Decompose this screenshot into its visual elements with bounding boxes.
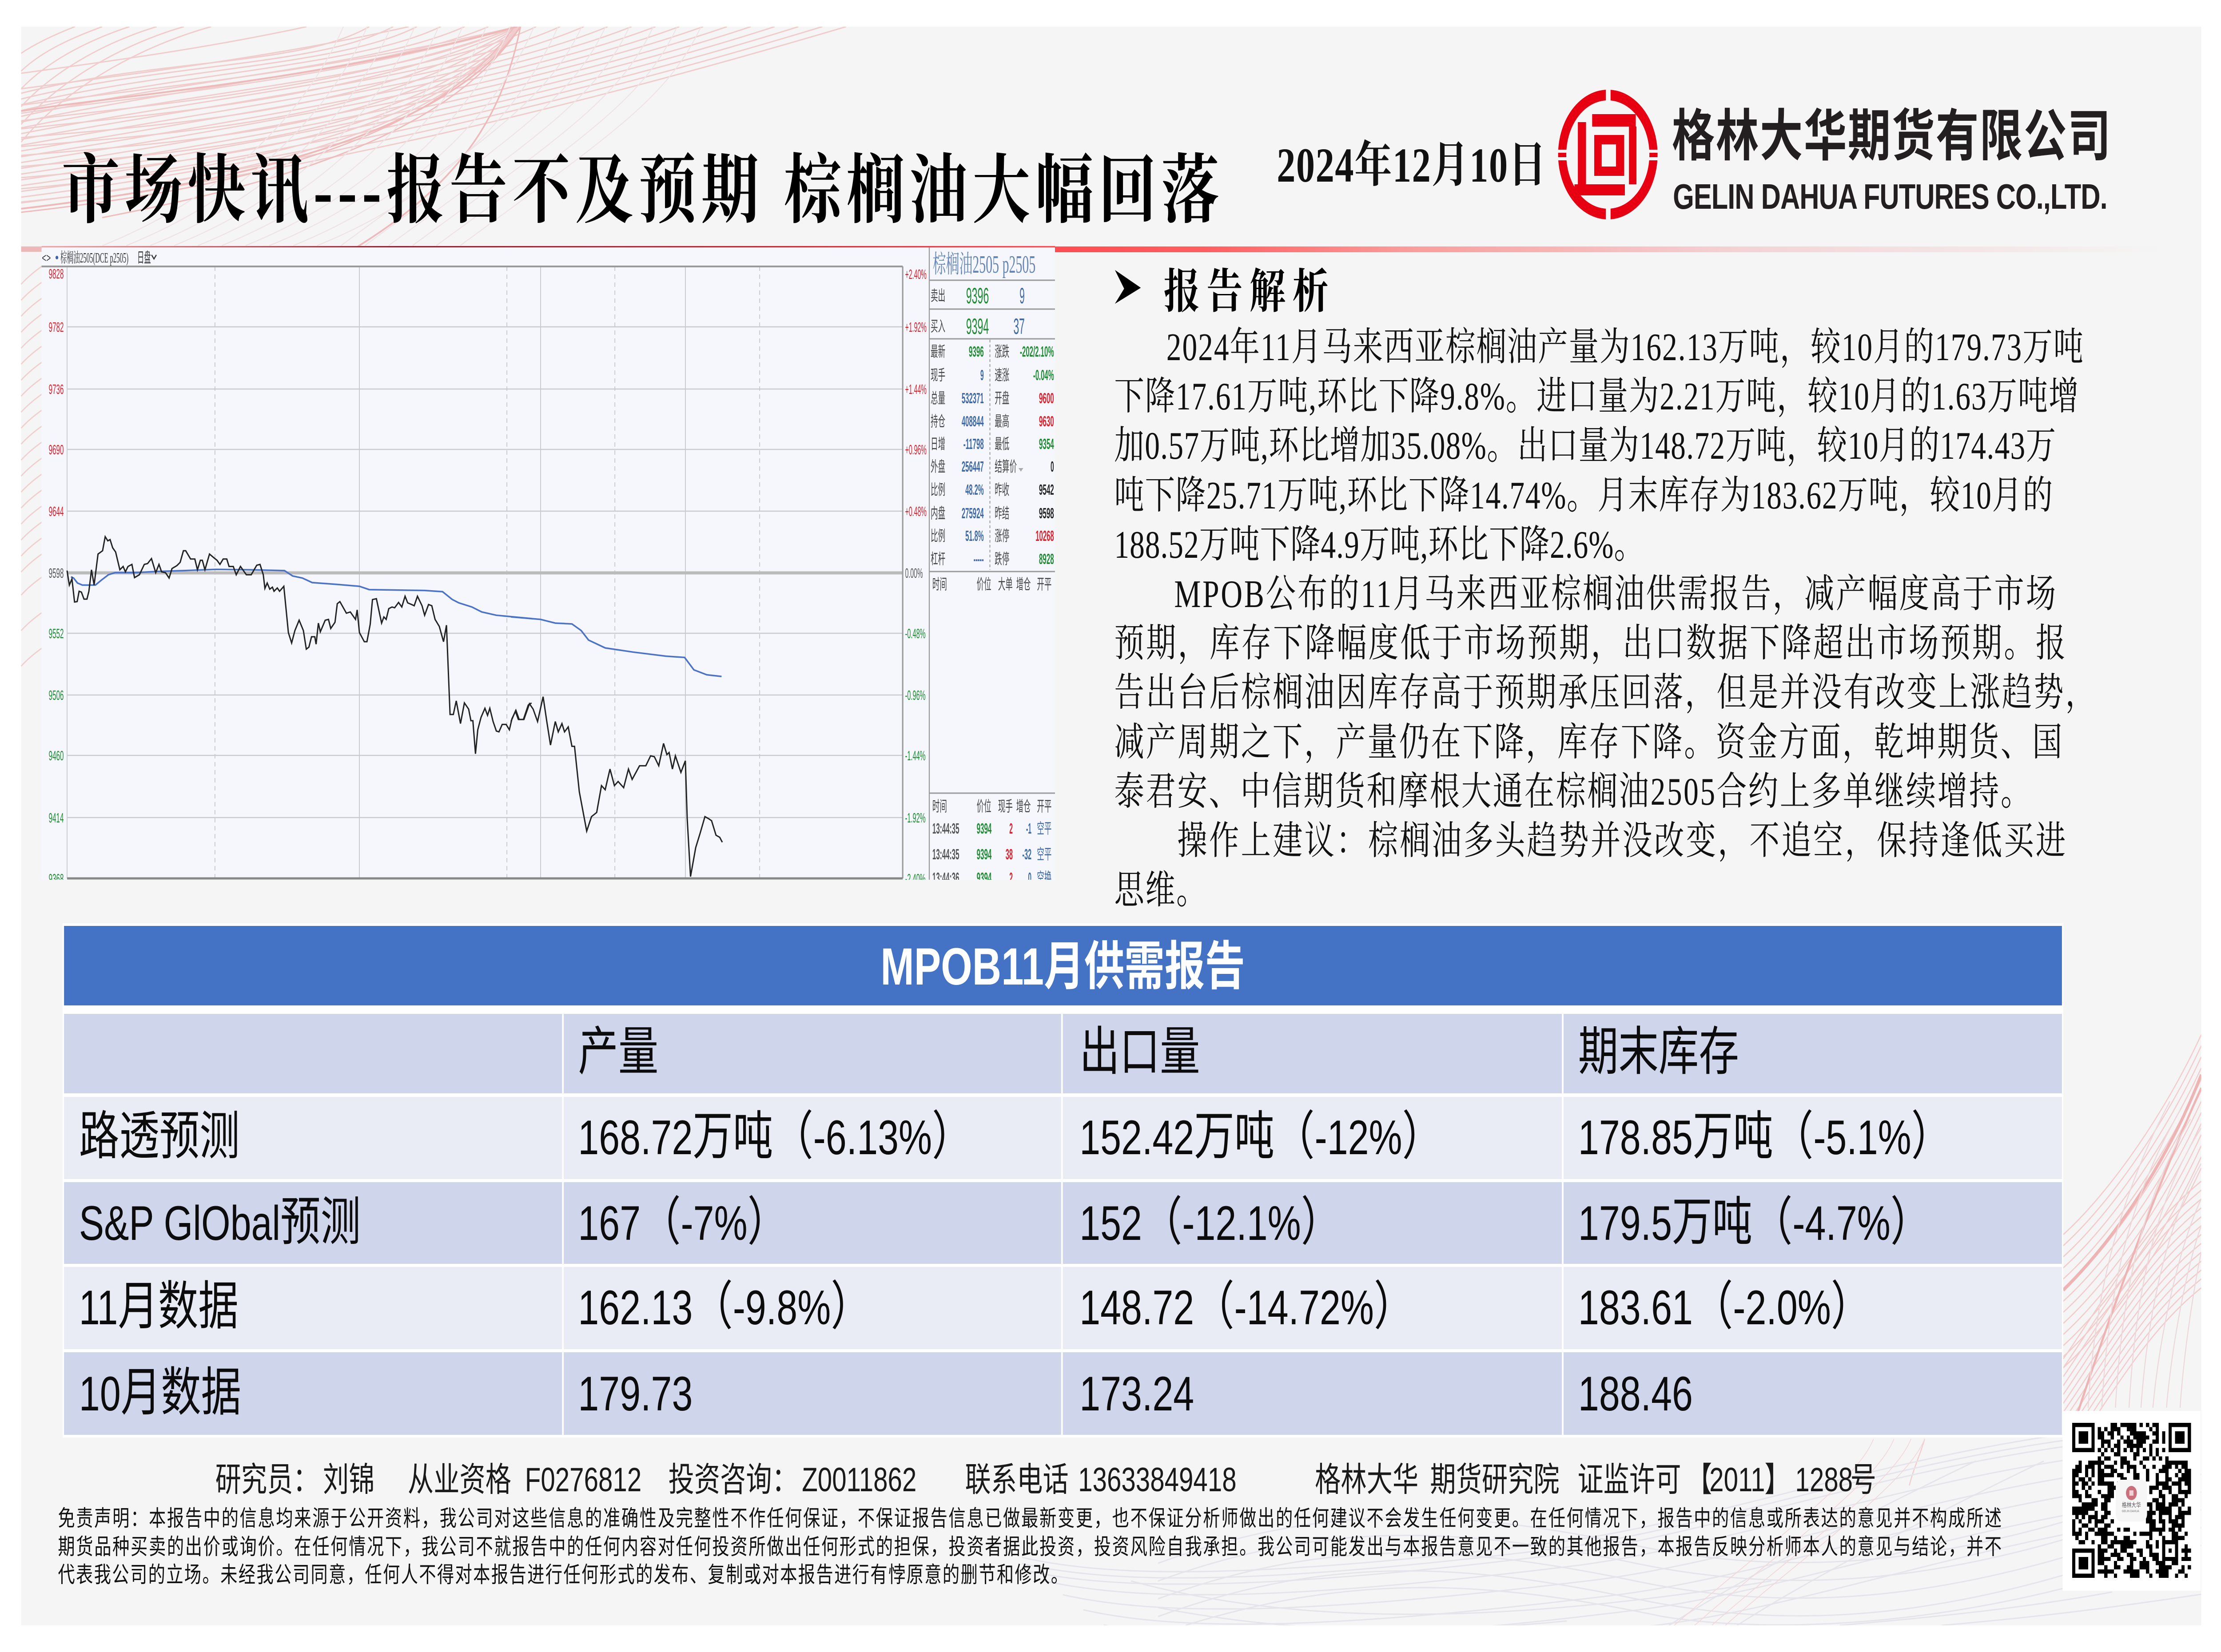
company name: 格林大华期货有限公司 — [1672, 105, 2111, 167]
researcher credentials line: 1288 — [1795, 1461, 1853, 1499]
quote statistics: 256447 — [962, 459, 984, 475]
QR centre logo: 格林大华 — [2122, 1501, 2141, 1509]
right percent axis: +1.92% — [905, 319, 927, 335]
red rule under header — [21, 246, 2162, 252]
chart toolbar: 棕榈油2505(DCE p2505) — [60, 250, 128, 266]
researcher credentials line: 联系电话 — [965, 1461, 1069, 1499]
left price axis: 9598 — [49, 565, 64, 581]
quote statistics: ----- — [974, 551, 984, 568]
large order header: 增仓 — [1016, 576, 1031, 593]
quote statistics: 涨跌 — [995, 344, 1009, 360]
icon: company logo — [1557, 89, 1658, 220]
left price axis: 9782 — [49, 319, 64, 335]
tick table: 0 — [1028, 870, 1031, 886]
quote statistics: 外盘 — [931, 459, 945, 475]
table row: October data: 10月数据 — [79, 1364, 241, 1422]
tick table: 13:44:36 — [932, 870, 959, 886]
quote statistics: 昨结 — [995, 505, 1009, 522]
right percent axis: -1.92% — [905, 810, 926, 826]
large order header: 大单 — [998, 576, 1013, 593]
left price axis: 9414 — [49, 810, 64, 826]
left price axis: 9690 — [49, 442, 64, 457]
quote statistics: 最高 — [995, 413, 1009, 430]
table row: S&P Global forecast: 167（-7%） — [578, 1193, 788, 1251]
table row: October data: 179.73 — [578, 1366, 693, 1421]
quote statistics: 9354 — [1039, 436, 1054, 453]
text block: report analysis body: 预期，库存下降幅度低于市场预期，出口数据下降超出市场预期。报 — [1114, 621, 2066, 665]
table row: November data: 183.61（-2.0%） — [1578, 1278, 1871, 1336]
table row: S&P Global forecast: 179.5万吨（-4.7%） — [1578, 1193, 1930, 1251]
heading: report analysis: 报告解析 — [1164, 266, 1329, 318]
researcher credentials line: 2011 — [1709, 1461, 1765, 1499]
tick table: 9394 — [977, 846, 992, 863]
tick table: -32 — [1022, 846, 1031, 863]
quote statistics: 51.8% — [965, 528, 984, 544]
left price axis: 9368 — [49, 871, 64, 886]
quote panel — [929, 247, 1055, 886]
large order header: 时间 — [932, 576, 947, 593]
quote statistics: 9 — [980, 367, 984, 384]
tick table: 价位 — [977, 798, 991, 815]
left price axis: 9644 — [49, 504, 64, 519]
tick table: 时间 — [932, 798, 947, 815]
text block: report analysis body: 思维。 — [1114, 868, 1206, 912]
bid and ask: 卖出 — [931, 288, 945, 304]
title: 市场快讯---报告不及预期 棕榈油大幅回落 — [62, 149, 1219, 233]
left price axis: 9460 — [49, 748, 64, 763]
researcher credentials line — [215, 1461, 1876, 1499]
quote statistics: -0.04% — [1033, 367, 1054, 384]
background waves: left margin — [21, 266, 42, 666]
quote statistics: 9600 — [1039, 390, 1054, 407]
quote statistics — [931, 344, 1054, 568]
tick table: 9394 — [977, 870, 992, 886]
large order header: 开平 — [1037, 576, 1051, 593]
table row: S&P Global forecast: S&P GlObal预测 — [79, 1193, 361, 1251]
disclaimer — [58, 1506, 2002, 1587]
researcher credentials line: F0276812 — [525, 1461, 641, 1499]
bid and ask: 9394 — [966, 314, 989, 339]
chart toolbar: 日盘 — [137, 250, 151, 266]
researcher credentials line: 期货研究院 — [1430, 1461, 1560, 1499]
researcher credentials line: 号 — [1851, 1461, 1876, 1499]
table header row: 出口量 — [1079, 1023, 1200, 1081]
tick table: 开平 — [1037, 798, 1051, 815]
bid and ask: 37 — [1013, 314, 1025, 339]
left price axis — [49, 266, 64, 886]
quote statistics: 0 — [1051, 459, 1054, 475]
tick table: 空换 — [1037, 870, 1051, 886]
background waves: bottom-right grey lines — [1022, 1438, 2201, 1625]
right percent axis: -2.40% — [905, 871, 926, 886]
table row: Reuters forecast: 178.85万吨（-5.1%） — [1578, 1108, 1951, 1166]
left price axis: 9736 — [49, 381, 64, 397]
text block: report analysis body: 2024年11月马来西亚棕榈油产量为162.13万吨，较10月的179.73万吨 — [1166, 325, 2083, 369]
quote statistics: -202/2.10% — [1020, 344, 1054, 360]
table row: November data: 148.72（-14.72%） — [1079, 1278, 1414, 1336]
table header row — [64, 1014, 2062, 1093]
quote statistics: 日增 — [931, 436, 945, 453]
researcher credentials line: 【 — [1686, 1461, 1712, 1499]
icon: arrow bullet — [1115, 270, 1141, 304]
disclaimer: 期货品种买卖的出价或询价。在任何情况下，我公司不就报告中的任何内容对任何投资所做出任何形式的担保，投资者据此投资，投资风险自我承担。我公司可能发出与本报告意见不一致的其他报告，本报告反映分析师本人的意见与结论，并不 — [58, 1535, 2002, 1559]
company english name: GELIN DAHUA FUTURES CO.,LTD. — [1673, 177, 2108, 217]
table title bar — [64, 926, 2062, 1005]
right percent axis: +2.40% — [905, 266, 927, 282]
quote statistics: 涨停 — [995, 528, 1009, 544]
tick table: 空平 — [1037, 846, 1051, 863]
table row: Reuters forecast: 168.72万吨（-6.13%） — [578, 1108, 972, 1166]
large order header: 价位 — [977, 576, 991, 593]
tick table: 增仓 — [1016, 798, 1031, 815]
table row: Reuters forecast — [64, 1097, 2062, 1179]
quote statistics: 9630 — [1039, 413, 1054, 430]
bid and ask: 9396 — [966, 284, 989, 308]
bid and ask: 买入 — [931, 318, 945, 335]
quote statistics: 408844 — [962, 413, 984, 430]
disclaimer: 免责声明：本报告中的信息均来源于公开资料，我公司对这些信息的准确性及完整性不作任何保证，不保证报告信息已做最新变更，也不保证分析师做出的任何建议不会发生任何变更。在任何情况下，报告中的信息或所表达的意见并不构成所述 — [58, 1506, 2002, 1531]
tick table: 38 — [1006, 846, 1013, 863]
chart toolbar: <> — [42, 251, 51, 265]
left price axis: 9506 — [49, 687, 64, 703]
quote statistics: 总量 — [931, 390, 945, 407]
QR centre logo — [2116, 1480, 2147, 1521]
right percent axis: -0.96% — [905, 687, 926, 703]
tick table: 13:44:35 — [932, 846, 959, 863]
quote statistics: 速涨 — [995, 367, 1009, 384]
quote title: 棕榈油2505 p2505 — [933, 251, 1035, 278]
text block: report analysis body: 告出台后棕榈油因库存高于预期承压回落，但是并没有改变上涨趋势， — [1114, 671, 2095, 714]
disclaimer: 代表我公司的立场。未经我公司同意，任何人不得对本报告进行任何形式的发布、复制或对本报告进行有悖原意的删节和修改。 — [58, 1563, 1068, 1587]
right percent axis: -1.44% — [905, 748, 926, 763]
quote statistics: 比例 — [931, 528, 945, 544]
quote statistics: 比例 — [931, 482, 945, 498]
table row: October data: 188.46 — [1578, 1366, 1693, 1421]
quote statistics: 跌停 — [995, 551, 1009, 568]
table row: November data: 11月数据 — [79, 1278, 239, 1336]
researcher credentials line: 证监许可 — [1577, 1461, 1681, 1499]
icon: QR code — [2062, 1411, 2201, 1591]
background waves: top-left red lines — [21, 27, 846, 249]
researcher credentials line: 刘锦 — [323, 1461, 375, 1499]
table row: November data: 162.13（-9.8%） — [578, 1278, 871, 1336]
background waves: top-left fan — [103, 27, 701, 246]
tick table: 空平 — [1037, 821, 1051, 837]
quote statistics: 532371 — [962, 390, 984, 407]
text block: report analysis body: 泰君安、中信期货和摩根大通在棕榈油2505合约上多单继续增持。 — [1114, 770, 2030, 813]
researcher credentials line: 研究员： — [215, 1461, 319, 1499]
tick table: 2 — [1009, 870, 1013, 886]
researcher credentials line: 格林大华 — [1315, 1461, 1418, 1499]
researcher credentials line: 】 — [1764, 1461, 1791, 1499]
quote statistics: 昨收 — [995, 482, 1009, 498]
text block: report analysis body — [1114, 325, 2095, 912]
table row: Reuters forecast: 路透预测 — [79, 1108, 240, 1166]
table row: S&P Global forecast — [64, 1182, 2062, 1264]
quote statistics: 杠杆 — [931, 551, 945, 568]
quote statistics: 现手 — [931, 367, 945, 384]
chart line: average price — [71, 569, 721, 676]
background waves: bottom-right red lines — [1909, 1035, 2201, 1485]
text block: report analysis body: 减产周期之下，产量仍在下降，库存下降。资金方面，乾坤期货、国 — [1114, 720, 2062, 764]
text block: report analysis body: 加0.57万吨,环比增加35.08%。出口量为148.72万吨，较10月的174.43万 — [1114, 424, 2056, 467]
quote statistics: 9598 — [1039, 505, 1054, 522]
table: MPOB November supply and demand — [63, 923, 2063, 1438]
table row: November data — [64, 1267, 2062, 1349]
text block: report analysis body: 下降17.61万吨,环比下降9.8%。进口量为2.21万吨，较10月的1.63万吨增 — [1114, 374, 2078, 418]
tick table: -1 — [1026, 821, 1031, 837]
tick table — [932, 798, 1051, 886]
quote statistics: 8928 — [1039, 551, 1054, 568]
quote statistics: 最低 — [995, 436, 1009, 453]
quote statistics: 结算价 — [995, 459, 1017, 475]
table row: October data — [64, 1352, 2062, 1435]
table row: S&P Global forecast: 152（-12.1%） — [1079, 1193, 1341, 1251]
quote statistics: 持仓 — [931, 413, 945, 430]
table row: October data: 173.24 — [1079, 1366, 1194, 1421]
bid and ask: 9 — [1019, 284, 1025, 308]
chart grid — [42, 266, 903, 878]
QR centre logo: GELIN DAHUA — [2122, 1509, 2139, 1513]
right percent axis: +0.96% — [905, 442, 927, 457]
right percent axis: +1.44% — [905, 381, 927, 397]
text block: report analysis body: MPOB公布的11月马来西亚棕榈油供需报告，减产幅度高于市场 — [1174, 572, 2056, 616]
table row: Reuters forecast: 152.42万吨（-12%） — [1079, 1108, 1442, 1166]
text block: report analysis body: 操作上建议：棕榈油多头趋势并没改变，不追空，保持逢低买进 — [1177, 819, 2066, 862]
large order header — [932, 576, 1051, 593]
quote statistics: -11798 — [963, 436, 984, 453]
right percent axis: +0.48% — [905, 504, 927, 519]
right percent axis: -0.48% — [905, 626, 926, 641]
tick table: 2 — [1009, 821, 1013, 837]
quote statistics: 开盘 — [995, 390, 1009, 407]
text block: report analysis body: 188.52万吨下降4.9万吨,环比下降2.6%。 — [1114, 523, 1644, 566]
tick table: 13:44:35 — [932, 821, 959, 837]
quote statistics: 48.2% — [965, 482, 984, 498]
researcher credentials line: Z0011862 — [802, 1461, 916, 1499]
quote statistics: 9396 — [969, 344, 984, 360]
chart line: last price — [67, 537, 722, 877]
researcher credentials line: 13633849418 — [1078, 1461, 1237, 1499]
left price axis: 9828 — [49, 266, 64, 282]
quote statistics: 9542 — [1039, 482, 1054, 498]
quote statistics: 10268 — [1035, 528, 1054, 544]
table title bar: MPOB11月供需报告 — [880, 938, 1245, 996]
quote statistics: 275924 — [962, 505, 984, 522]
table header row: 产量 — [578, 1023, 658, 1081]
researcher credentials line: 投资咨询： — [669, 1461, 798, 1499]
quote statistics: 最新 — [931, 344, 945, 360]
date: 2024年12月10日 — [1277, 139, 1546, 193]
tick table: 现手 — [998, 798, 1013, 815]
left price axis: 9552 — [49, 626, 64, 641]
table header row: 期末库存 — [1578, 1023, 1739, 1081]
tick table: 9394 — [977, 821, 992, 837]
text block: report analysis body: 吨下降25.71万吨,环比下降14.74%。月末库存为183.62万吨，较10月的 — [1114, 473, 2053, 517]
right percent axis: 0.00% — [905, 565, 923, 581]
bid and ask — [931, 284, 1025, 339]
quote statistics: 内盘 — [931, 505, 945, 522]
right percent axis — [905, 266, 927, 886]
researcher credentials line: 从业资格 — [408, 1461, 511, 1499]
panel: intraday price chart — [42, 247, 1055, 886]
